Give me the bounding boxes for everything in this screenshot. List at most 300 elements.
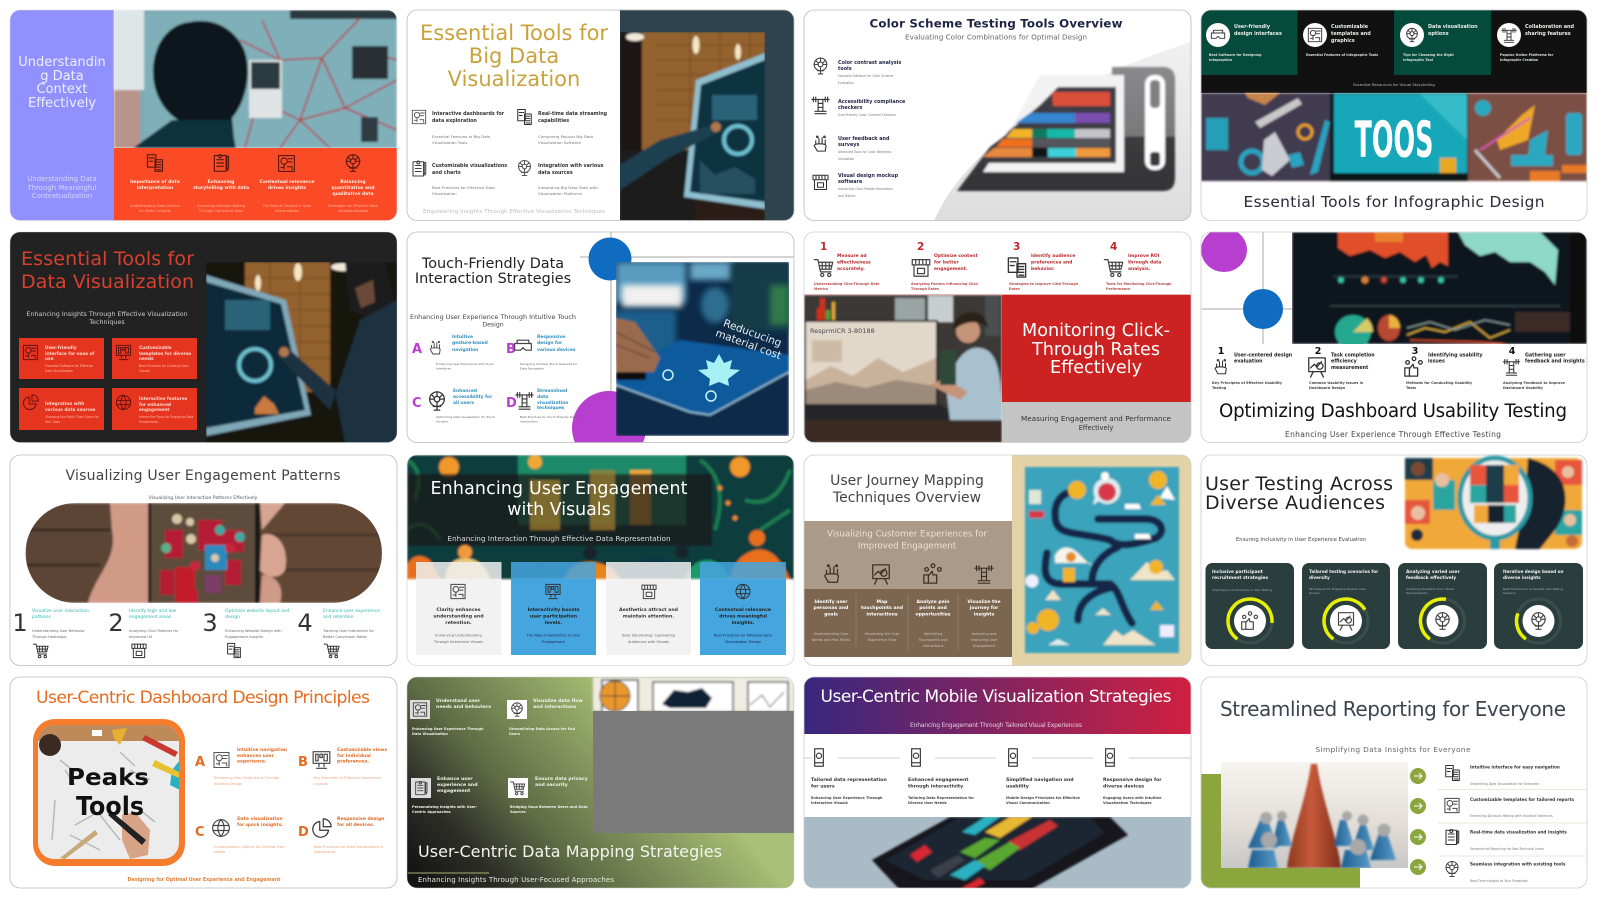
heading: User-Centric Mobile Visualization Strategies (820, 687, 1172, 707)
item 1: Visualize user interaction (32, 608, 89, 614)
item: accessibility: checkers (838, 105, 862, 111)
item: user-friendly design interfaces: User-friendly (1234, 24, 1271, 30)
heading: Understanding Data Context: Context (37, 82, 87, 97)
card: varied feedback: Analyzing Feedback from Varied (1406, 587, 1454, 591)
panel: Visualizing User Engagement slide (10, 455, 397, 666)
item C: C (412, 396, 422, 411)
heading: Touch-Friendly Data (421, 256, 564, 272)
item: simplified navigation (1006, 749, 1081, 805)
heading: Big Data Visualization: Essential Tools for (420, 21, 608, 45)
item: enhance user experience: Centric Approaches (412, 810, 451, 814)
item 2: 2 (108, 609, 124, 637)
item: color contrast: Evaluation (838, 81, 854, 85)
item: simplified navigation: Simplified navigation and (1006, 777, 1074, 783)
item B: Responsive (537, 334, 565, 340)
item: feedback: User feedback and (838, 136, 890, 142)
item: collaboration: Popular Online Platforms for (1500, 53, 1554, 57)
step descriptions: Interactions (923, 644, 944, 648)
item 2: 2 (1315, 346, 1321, 357)
step descriptions: Experience Flow (868, 638, 896, 642)
item B (298, 747, 387, 786)
item: data privacy: Sources (510, 810, 526, 814)
item A: enhances user (237, 753, 275, 759)
item 3: behavior. (1031, 266, 1055, 272)
item D: Interactions (520, 420, 538, 424)
item: mockup: and Testers (838, 194, 856, 198)
card: varied feedback (1398, 563, 1487, 652)
panel: tan subtitle band (804, 521, 1012, 589)
list item 1: Intuitive interface for easy navigation (1470, 764, 1560, 770)
item: feedback: Advanced Tools for Color Blindness (838, 150, 892, 154)
item: mockup: Visual design mockup (838, 173, 899, 179)
point descriptions: for Better Insights (139, 209, 171, 213)
step descriptions: Understanding User (814, 632, 849, 636)
item: enhance user experience: Enhance user (437, 776, 473, 782)
panel: four orange points (114, 148, 397, 221)
item 3 (1008, 241, 1079, 291)
item 1: Measure ad (837, 253, 867, 259)
item 1: 1 (820, 241, 827, 253)
photo: tablet with maple leaf (616, 262, 789, 436)
item 4: through data (1128, 260, 1161, 266)
item C: accessibility for (453, 394, 493, 400)
item 1: Understanding Click-Through Rate (814, 282, 880, 286)
item 4: Better Conversion Rates (323, 635, 367, 639)
card: customizable templates: needs (139, 356, 154, 362)
icon: chart (873, 565, 889, 584)
item A: Enhancing User Experience Through (214, 776, 279, 780)
item A: A (412, 342, 422, 357)
item B: Layouts (314, 782, 328, 786)
card: varied feedback: feedback effectively (1406, 575, 1456, 581)
item: data visualization options: Infographic Tool (1403, 58, 1433, 62)
item: customizable visualizations (413, 161, 507, 196)
card: interactive features: Presentation (139, 420, 158, 424)
item B (506, 334, 578, 370)
item 4: Tools for Monitoring Click-Through (1106, 282, 1172, 286)
logo text: TOOS: TOOS (1354, 111, 1434, 169)
icon: gear head (346, 155, 360, 171)
item: mockup (813, 173, 899, 198)
item: customizable templates: Essential Features of Infographic Tools (1306, 53, 1378, 57)
card: user-friendly interface: User-friendly (45, 345, 77, 351)
panel: gray subtitle block: Measuring Engagement and Performance (1021, 415, 1171, 423)
card: interactive features: Interactive features (139, 396, 188, 402)
card: interactivity: Interactivity boosts (528, 607, 580, 613)
item 3: design (225, 614, 240, 620)
card: interactivity: user participation (530, 614, 577, 620)
icon: dashboard (279, 156, 294, 171)
item 4: Improve ROI (1128, 253, 1160, 259)
panel: tan subtitle band: Improved Engagement (858, 542, 957, 552)
item: enhanced engagement: Enhanced engagement (908, 777, 969, 783)
card: interactive features: Interactive Tools for Engaging Data (139, 415, 193, 419)
card: iterative design: Iterative design based on (1503, 569, 1563, 574)
item: responsive design: Engaging Users with Intuitive (1103, 796, 1162, 800)
item C: Optimizing Data Visualization for Touch (436, 415, 495, 419)
card: varied feedback: Demographics (1406, 591, 1428, 595)
item D: Streamlined (537, 388, 567, 394)
item: integration (518, 160, 604, 196)
item D: D (506, 396, 517, 411)
screen label: ResprmiCR 3-80188 (810, 327, 875, 335)
item 2: Task completion (1331, 352, 1375, 358)
card: user-friendly interface: Essential Software for Effective (45, 364, 93, 368)
heading: Diverse Audiences (1205, 492, 1385, 514)
item: understand user needs: needs and behaviors (436, 704, 491, 710)
item 4: Gathering user (1525, 352, 1566, 358)
panel: brown steps band: insights (974, 612, 995, 618)
step descriptions: Identifying (924, 632, 942, 636)
illustration: magnifier over diverse faces (1405, 458, 1582, 549)
item 2 (911, 241, 980, 291)
item: understand user needs (410, 698, 491, 736)
item B: design for (537, 340, 563, 346)
item: real-time streaming (518, 110, 608, 145)
item C (412, 388, 495, 424)
card: interactivity: The Role of Aesthetics in User (526, 634, 581, 638)
point labels: Contextual relevance (259, 179, 315, 185)
photo: man touching big data monitor (620, 32, 765, 221)
item: mockup: software (838, 179, 863, 185)
item B: for individual (337, 753, 371, 759)
decoration: green blocks (1201, 774, 1360, 888)
item A: Enhancing User Experience with Touch (436, 362, 494, 366)
item 3: Methods for Conducting Usability (1406, 381, 1473, 385)
panel: brown steps band: opportunities (915, 612, 951, 618)
step descriptions: Needs and Pain Points (812, 638, 851, 642)
item A: Intuitive navigation (237, 747, 287, 753)
card: tailored scenarios: Groups (1309, 591, 1320, 595)
point labels: drives insights (268, 185, 306, 191)
item 2: Improved UX (129, 635, 153, 639)
photo: hand holding phone with figures (25, 503, 383, 603)
item C: Customization Options for Diverse User (214, 845, 285, 849)
item 2: Optimize content (934, 253, 979, 259)
item: data privacy: and security (535, 782, 568, 788)
item: mockup: Interactive Color Palette Generators (838, 187, 893, 191)
item: integration: Integrating Big Data Tools with (538, 185, 598, 190)
decoration: blue circle (588, 238, 632, 280)
item B: B (298, 755, 308, 770)
item 2 (1309, 346, 1375, 390)
heading: Essential Tools for (21, 248, 194, 270)
gauge: 21 percent (1508, 590, 1569, 652)
panel: Streamlined Reporting slide (1201, 677, 1587, 888)
subtitle: Enhancing Engagement Through Tailored Visual Experiences (910, 722, 1082, 729)
item 3: Strategies to Improve Click-Through (1009, 282, 1079, 286)
photo lettering (67, 765, 149, 822)
item 1 (814, 241, 880, 291)
item 4 (1503, 346, 1585, 390)
item 3: Rates (1009, 287, 1020, 291)
step descriptions: Engagement (973, 644, 996, 648)
item: visualize data flow: and interactions (533, 704, 577, 710)
subtitle: Visualizing User Interaction Patterns Effectively (149, 495, 258, 501)
card: iterative design: Sessions (1503, 591, 1516, 595)
point labels: Importance of data (130, 179, 180, 185)
item: feedback (814, 136, 892, 161)
item: visualize data flow: Visualize data flow (533, 698, 583, 704)
point labels: Balancing (340, 179, 366, 185)
item 4: 4 (1110, 241, 1117, 253)
heading: User-Centric Dashboard Design Principles (36, 688, 370, 708)
item 4: Performance (1106, 287, 1131, 291)
panel: red title block (1002, 295, 1191, 402)
item D: data (537, 394, 548, 400)
item D: for all devices. (337, 822, 375, 828)
item: real-time streaming: Comparing Popular Big Data (538, 134, 594, 139)
item 2: Analyzing Click Patterns for (129, 629, 179, 633)
item 4: feedback and insights (1525, 358, 1585, 364)
item: customizable visualizations: Visualization (432, 191, 457, 196)
point descriptions: Through Contextual Data (198, 209, 243, 213)
footer tagline: Empowering Insights Through Effective Visualization Techniques (423, 209, 605, 215)
icon: document (148, 155, 162, 171)
item: responsive design: diverse devices (1103, 784, 1144, 790)
icon: tools (975, 566, 993, 583)
list item 3: Real-time data visualization and insights (1470, 830, 1567, 834)
item: customizable templates: graphics (1331, 38, 1355, 44)
item: tailored data (811, 749, 887, 805)
panel: brown steps band (804, 589, 1012, 657)
point labels: quantitative and (331, 185, 375, 191)
card: inclusive recruitment (1206, 563, 1294, 652)
card: integration: Your Data (45, 420, 60, 424)
card: iterative design (1494, 563, 1583, 652)
item: feedback: Simulation (838, 157, 854, 161)
item: simplified navigation: Mobile Design Principles for Effective (1006, 796, 1081, 800)
panel: Enhancing User Engagement with Visuals slide (407, 455, 794, 666)
card: interactivity: Engagement (542, 640, 566, 644)
item: customizable visualizations: Best Practices for Effective Data (432, 185, 495, 190)
item: tailored data: Enhancing User Experience Through (811, 796, 883, 800)
list item 2: Customizable templates for tailored reports (1470, 797, 1574, 802)
heading: Monitoring Click- (1022, 321, 1170, 341)
heading: Essential Tools for Infographic Design (1244, 193, 1544, 211)
card: inclusive recruitment: recruitment strategies (1212, 575, 1268, 581)
decoration: purple blob (1201, 228, 1247, 272)
item: real-time streaming: Real-time data streaming (538, 111, 608, 117)
heading: User-Centric Data Mapping Strategies (418, 842, 722, 861)
heading: Big Data Visualization: Big Data (469, 44, 559, 68)
heading: Understanding Data Context: g Data (40, 69, 84, 84)
item: customizable visualizations: and charts (432, 170, 461, 176)
card: contextual relevance: Contextual relevance (715, 607, 771, 613)
item 4: Dashboard Usability (1503, 386, 1544, 390)
photo: dashboard screens (1292, 232, 1587, 349)
item: interactive dashboards: Essential Features of Big Data (432, 134, 491, 139)
item B: Data Navigation (520, 366, 544, 370)
item 4: Analyzing Feedback to Improve (1503, 381, 1566, 385)
item 2: 2 (917, 241, 924, 253)
item 4 (1104, 241, 1172, 291)
item: customizable templates (1303, 23, 1378, 57)
item: tailored data: Interactive Visuals (811, 801, 848, 805)
subtitle: Evaluating Color Combinations for Optimal Design (905, 32, 1087, 42)
item: tailored data: Tailored data representation (811, 777, 887, 783)
item: user-friendly design interfaces (1206, 23, 1282, 62)
item: enhance user experience (411, 776, 478, 814)
item 3: Tests (1406, 386, 1416, 390)
panel: brown steps band: personas and (814, 605, 848, 611)
card: tailored scenarios: Tailored testing scenarios for (1309, 569, 1379, 574)
subtitle: Enhancing Insights Through User-Focused Approaches (418, 876, 614, 884)
item 2: Dashboard Design (1309, 386, 1346, 390)
panel: brown steps band: touchpoints and (861, 605, 903, 611)
item 3: 3 (202, 609, 218, 637)
item 4: 4 (1509, 346, 1516, 357)
item: accessibility: Accessibility compliance (838, 99, 906, 105)
item: color contrast: Essential Software for Color Scheme (838, 74, 893, 78)
item: simplified navigation: usability (1006, 784, 1029, 790)
heading: Enhancing User Engagement (430, 479, 688, 499)
item: integration: Integration with various (538, 163, 604, 169)
item D: Dashboards (314, 850, 335, 854)
item 4: Enhance user experience (323, 608, 380, 614)
card: customizable templates: Visuals (139, 369, 150, 373)
item A: Intuitive Design (214, 782, 242, 786)
subtitle: Techniques (88, 318, 125, 326)
item: enhanced engagement: Diverse User Needs (908, 801, 947, 805)
point descriptions: Enhancing Decision-Making (197, 204, 245, 208)
card: tailored scenarios: diversity (1309, 575, 1330, 580)
item B: various devices (537, 347, 576, 353)
photo lettering: Peaks (67, 765, 149, 791)
image strip: framed maps and charts (593, 677, 794, 713)
item: visualize data flow: Streamlining Data Access for End (509, 727, 576, 731)
card: tailored scenarios (1302, 563, 1390, 652)
list item 1: Simplifying Data Visualization for Everyone (1470, 782, 1539, 786)
footer tagline: Designing for Optimal User Experience and Engagement (128, 877, 281, 883)
subtitle: Ensuring Inclusivity in User Experience Evaluation (1236, 537, 1366, 543)
item A: Intuitive (452, 334, 473, 340)
illustration: jungle crowd (407, 455, 794, 579)
item 1: Metrics (814, 287, 828, 291)
card: contextual relevance (700, 562, 786, 655)
item A (195, 747, 287, 786)
heading: Through Rates (1031, 340, 1160, 360)
list item 3 (1410, 829, 1567, 851)
subtitle: Enhancing Insights Through Effective Visualization (26, 310, 188, 318)
step descriptions: Visualizing the User (865, 632, 900, 636)
panel: brown steps band: interactions (866, 612, 898, 618)
item 4: analysis. (1128, 266, 1151, 272)
heading: Understanding Data Context: Effectively (28, 96, 96, 111)
card: iterative design: Best Practices for Accessible User Testing (1503, 587, 1563, 591)
card: integration (19, 388, 104, 430)
panel: User Testing Across Diverse Audiences slide (1201, 455, 1587, 666)
panel: brown steps band: Identify user (814, 599, 848, 605)
icon: thumb (924, 564, 941, 583)
item B: B (506, 342, 516, 357)
item: enhanced engagement: through interactivity (908, 784, 963, 790)
item: simplified navigation: Visual Communication (1006, 801, 1050, 805)
item: data visualization options (1400, 23, 1478, 62)
heading: Effectively (1050, 358, 1142, 378)
panel: Monitoring Click-Through slide (804, 232, 1191, 443)
point labels: Enhancing (208, 179, 234, 185)
item: data privacy (508, 776, 588, 814)
item: understand user needs: Enhancing User Experience Through (412, 727, 484, 731)
item: user-friendly design interfaces: Infographics (1209, 58, 1232, 62)
item 1: User-centered design (1234, 352, 1293, 358)
item: user-friendly design interfaces: design interfaces (1234, 31, 1282, 37)
gray image placeholder (593, 711, 794, 833)
card: iterative design: diverse insights (1503, 575, 1541, 580)
card: user-friendly interface (19, 338, 104, 379)
card: user-friendly interface: Data Visualization (45, 369, 73, 373)
item D (506, 388, 577, 424)
card: customizable templates (112, 338, 197, 379)
item 2: engagement. (934, 266, 968, 272)
photo: Peaks Tools sketch (33, 719, 185, 866)
gauge: 43 percent (1412, 590, 1473, 652)
item 4 (297, 608, 380, 658)
item 4: 4 (297, 609, 313, 637)
card: user-friendly interface: interface for ease of (45, 351, 95, 357)
item 2: Analyzing Factors Influencing Click- (911, 282, 980, 286)
item D: Best Practices for Touch-Friendly Data (520, 415, 577, 419)
item: enhance user experience: experience and (437, 782, 478, 788)
list item 3: Streamlined Reporting for Non-Technical Users (1470, 847, 1544, 851)
card: clarity (416, 562, 502, 655)
card: aesthetics (606, 562, 691, 655)
item A: experience. (237, 758, 267, 764)
item B: Key Elements of Effective Dashboard (314, 776, 380, 780)
heading: User Journey Mapping (830, 473, 984, 489)
item: responsive design (1103, 749, 1162, 805)
card: aesthetics: maintain attention. (623, 614, 674, 620)
item: understand user needs: Data Visualization (412, 732, 448, 736)
item 4: Tracking User Interaction for (322, 629, 375, 633)
item 1: accurately. (837, 266, 865, 272)
icon: notebook (214, 155, 228, 171)
card: inclusive recruitment: Importance of Inclusivity in User Testing (1212, 588, 1272, 592)
photo: man at monitor with brick wall (206, 262, 397, 443)
item: data privacy: Ensure data privacy (535, 776, 588, 782)
panel: Essential Tools for Big Data slide (407, 10, 794, 221)
item: color contrast (814, 58, 901, 85)
panel: User-Centric Dashboard Design slide (10, 677, 397, 888)
subtitle: Enhancing User Experience Through Effective Testing (1285, 430, 1501, 439)
item 1: patterns (32, 614, 52, 620)
item 1: 1 (12, 609, 28, 637)
step descriptions: Improving User (971, 638, 998, 642)
item D: Responsive design (337, 816, 384, 822)
subtitle text: Contextualization (32, 192, 92, 200)
item C: Screens (436, 420, 448, 424)
subtitle: Enhancing Interaction Through Effective Data Representation (448, 534, 670, 543)
item 4: and retention (323, 614, 354, 620)
point descriptions: Interpretation (275, 209, 299, 213)
list item 4: Seamless integration with existing tools (1470, 862, 1566, 866)
item 1: Testing (1212, 386, 1227, 390)
item: understand user needs: Understand user (436, 698, 481, 704)
point labels: storytelling with data (193, 185, 249, 191)
item: data visualization options: options (1428, 31, 1449, 37)
card: clarity: retention. (445, 620, 472, 626)
photo: tablet dashboard (804, 817, 1191, 890)
item 2: Common Usability Issues in (1309, 381, 1364, 385)
subtitle text: Understanding Data (27, 175, 97, 183)
panel: brown steps band: journey for (969, 605, 999, 611)
item 1 (12, 608, 89, 658)
card: interactivity: levels. (545, 620, 562, 626)
item 1: evaluation (1234, 358, 1263, 364)
item: visualize data flow: Users (509, 732, 520, 736)
item 3: Identify audience (1031, 253, 1075, 259)
